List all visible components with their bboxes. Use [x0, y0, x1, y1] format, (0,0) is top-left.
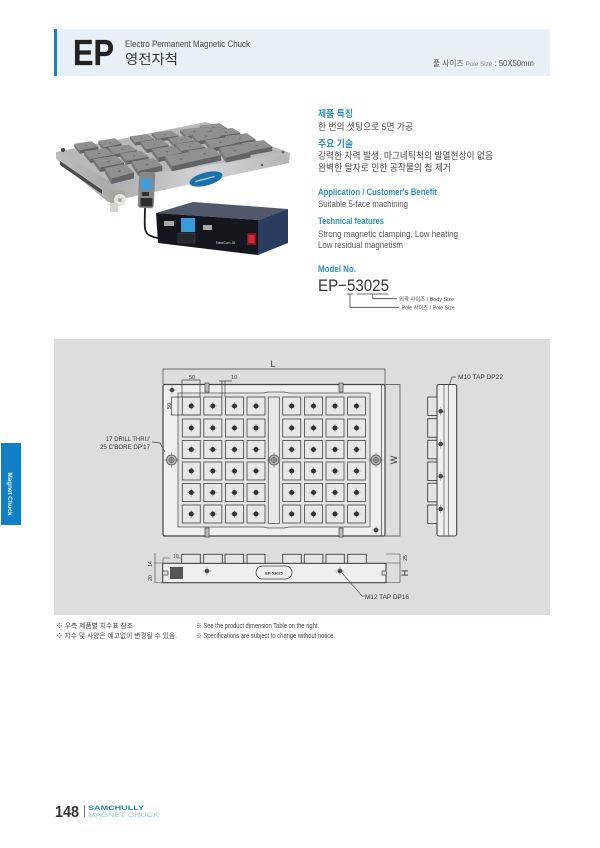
footer: page number and brand: MAGNET CHUCK: [88, 812, 160, 819]
QR style plate: [170, 567, 183, 579]
center slot: [268, 397, 279, 524]
english benefit heading: Application / Customer's Benefit: [318, 187, 437, 197]
footnotes: ※ Specifications are subject to change without notice.: [196, 632, 335, 640]
dimension labels: [100, 359, 399, 464]
front poles: [182, 554, 366, 563]
footer: page number and brand: 148: [55, 804, 79, 821]
model number key: [347, 294, 455, 312]
footer: page number and brand: SAMCHULLY: [88, 805, 145, 812]
feature text block: [318, 108, 493, 312]
model number key: Pole 사이즈 / Pole Size: [402, 304, 455, 312]
pole grid: [182, 397, 366, 523]
front labels: H: [400, 570, 410, 576]
subtitle korean: 영전자척: [125, 52, 178, 67]
english technical line 1: Strong magnetic clamping, Low heating: [318, 229, 458, 239]
front labels: M12 TAP DP16: [365, 594, 409, 601]
subtitle english: Electro Permanent Magnetic Chuck: [125, 39, 250, 50]
pole tiles: [74, 123, 272, 184]
korean feature line: 한 번의 셋팅으로 5면 가공: [318, 122, 413, 133]
english benefit line: Suitable 5-face machining: [318, 199, 408, 209]
korean technology heading: 주요 기술: [318, 138, 353, 150]
footer: page number and brand: [55, 804, 160, 821]
model heading: Model No.: [318, 264, 356, 274]
side poles: [428, 397, 437, 524]
footnotes: [56, 621, 335, 640]
name plate: [256, 566, 292, 579]
korean technology line 2: 완벽한 탈자로 인한 공작물의 칩 제거: [318, 162, 451, 174]
connector: [109, 190, 126, 212]
footnotes: ※ See the product dimension Table on the right.: [196, 622, 319, 630]
dimension labels: 50: [189, 375, 195, 381]
T slots: [163, 571, 386, 575]
footnotes: ※ 치수 및 사양은 예고없이 변경될 수 있음.: [56, 631, 177, 640]
side holes: [436, 407, 445, 514]
pole size: 풀 사이즈 Pole Size : 50X50mm: [433, 58, 534, 68]
front view drawing: [148, 553, 410, 601]
drawing panel: [54, 339, 550, 615]
side view drawing: [428, 374, 503, 536]
dimension labels: 25 C'BORE DP'17: [100, 444, 150, 451]
dimension labels: 17 DRILL THRU': [106, 436, 150, 443]
M10 label: M10 TAP DP22: [458, 374, 503, 381]
dimension labels: L: [270, 359, 276, 369]
front labels: 14: [148, 561, 154, 567]
name plate: EP-53025: [265, 570, 284, 576]
dimension labels: 10: [231, 375, 237, 381]
chuck body: [56, 122, 290, 202]
controller box: NeoCon-III: [216, 240, 235, 245]
controller box: [156, 202, 288, 255]
front labels: 20: [148, 575, 154, 581]
product photo: magnetic chuck and controller: [56, 122, 290, 255]
dimension labels: 50: [167, 403, 173, 409]
model number key: 외곽 사이즈 / Body Size: [399, 295, 454, 303]
header band: [54, 29, 550, 76]
dimension labels: W: [389, 455, 399, 464]
model number: EP−53025: [318, 276, 389, 295]
front labels: 25: [403, 555, 409, 561]
footnotes: ※ 우측 제품별 치수표 참조: [56, 621, 134, 630]
handheld pendant: [138, 172, 160, 238]
heading: EP: EP: [73, 32, 114, 73]
front labels: [148, 554, 410, 601]
front dimensions: [154, 553, 400, 596]
front holes: [202, 566, 344, 576]
mounting bolts: [164, 383, 384, 537]
dimension lines: [152, 369, 456, 536]
side tab: Magnet Chuck: [6, 472, 13, 516]
front labels: 10: [173, 554, 179, 560]
side tab: [1, 443, 21, 525]
korean technology line 1: 강력한 자력 발생, 마그네틱척의 발열현상이 없음: [318, 150, 493, 162]
english technical heading: Technical features: [318, 216, 384, 226]
english technical line 2: Low residual magnetism: [318, 240, 403, 250]
top view drawing: [100, 359, 456, 537]
korean features heading: 제품 특징: [318, 108, 353, 120]
